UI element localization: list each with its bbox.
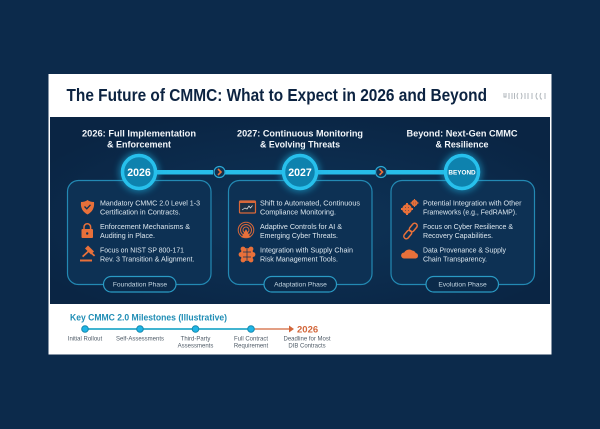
heading: 2027: [237, 128, 363, 150]
node: 2027: 2027: [288, 167, 312, 179]
text: adaptive: [260, 222, 342, 240]
label: deadline: DIB Contracts: [288, 344, 326, 350]
heading: 2026: [82, 128, 196, 150]
text: integration: Integration with Supply Chain: [260, 246, 353, 254]
node: beyond: BEYOND: [448, 169, 476, 176]
text: mandatory: [100, 198, 200, 216]
white card: [48, 74, 552, 354]
label: deadline: [283, 336, 331, 350]
milestone year: 2026: [297, 324, 318, 336]
panel: timeline: [50, 117, 550, 304]
pill: evolution: Evolution Phase: [438, 282, 487, 289]
pill: foundation: [104, 276, 176, 292]
icon: brain network: [239, 247, 255, 262]
node: 2026: 2026: [127, 167, 151, 179]
arrow: to 2026: [289, 326, 294, 332]
node: 2026: [119, 152, 159, 192]
text: enforcement: Enforcement Mechanisms &: [100, 222, 190, 231]
heading: beyond: & Resilience: [436, 138, 488, 150]
text: nist: Focus on NIST SP 800-171: [100, 246, 184, 254]
text: adaptive: Adaptive Controls for AI &: [260, 222, 342, 231]
label: self-assessments: Self-Assessments: [116, 336, 164, 342]
pill: evolution: [426, 276, 498, 292]
text: provenance: Data Provenance & Supply: [423, 246, 506, 254]
arrow node 1: [214, 166, 225, 178]
icon: padlock: [82, 224, 93, 238]
text: nist: Rev. 3 Transition & Alignment.: [100, 254, 194, 264]
pill: adaptation: Adaptation Phase: [274, 282, 327, 289]
text: integration: [260, 246, 353, 264]
icon: chain link: [403, 222, 418, 240]
text: integration: Risk Management Tools.: [260, 254, 338, 264]
panel: card beyond: [391, 180, 534, 284]
icon: radar alert: [238, 222, 254, 238]
text: provenance: [423, 246, 506, 264]
text: potential: Frameworks (e.g., FedRAMP).: [423, 208, 517, 216]
text: provenance: Chain Transparency.: [423, 254, 487, 264]
heading: 2026: 2026: Full Implementation: [82, 128, 196, 138]
label: initial rollout: Initial Rollout: [68, 336, 103, 342]
heading: 2027: 2027: Continuous Monitoring: [237, 128, 363, 138]
title: The Future of CMMC: What to Expect in 2026 and Beyond: [66, 85, 487, 105]
dot: initial: [82, 326, 88, 332]
text: shift: Compliance Monitoring.: [260, 208, 336, 216]
panel: card 2026: [68, 180, 211, 284]
node: 2027: [280, 152, 320, 192]
icon: cloud: [401, 250, 418, 258]
icon: shield: [81, 200, 94, 214]
text: shift: Shift to Automated, Continuous: [260, 198, 360, 208]
label: deadline: Deadline for Most: [283, 336, 331, 342]
label: full contract: Full Contract: [234, 336, 268, 342]
label: third-party: Assessments: [178, 344, 213, 350]
dot: self: [137, 326, 143, 332]
text: enforcement: [100, 222, 190, 240]
text: enforcement: Auditing in Place.: [100, 231, 155, 240]
icon: gavel: [80, 246, 95, 262]
connector lines: [150, 170, 457, 174]
label: third-party: [178, 336, 213, 350]
heading: beyond: [406, 128, 518, 150]
pill: foundation: Foundation Phase: [113, 282, 167, 289]
heading: 2026: & Enforcement: [107, 138, 171, 150]
dot: full: [248, 326, 254, 332]
text: potential: Potential Integration with Other: [423, 198, 522, 208]
panel: card 2027: [228, 180, 372, 284]
node: beyond: [442, 152, 482, 192]
text: potential: [423, 198, 522, 216]
label: full contract: Requirement: [234, 344, 269, 350]
text: focus: Focus on Cyber Resilience &: [423, 222, 513, 231]
pill: adaptation: [264, 276, 336, 292]
text: mandatory: Certification in Contracts.: [100, 208, 180, 216]
dot: third-party: [192, 326, 199, 332]
text: nist: [100, 246, 194, 264]
label: full contract: [234, 336, 269, 350]
milestone timeline: [82, 324, 318, 336]
label: third-party: Third-Party: [181, 336, 210, 342]
arrow node 2: [376, 166, 386, 178]
text: mandatory: Mandatory CMMC 2.0 Level 1-3: [100, 198, 200, 208]
text: focus: [423, 222, 513, 240]
icon: gears: [401, 199, 418, 215]
text: adaptive: Emerging Cyber Threats.: [260, 231, 338, 240]
heading: 2027: & Evolving Threats: [260, 138, 340, 150]
heading: beyond: Beyond: Next-Gen CMMC: [406, 128, 518, 138]
text: shift: [260, 198, 360, 216]
milestones heading: Key CMMC 2.0 Milestones (Illustrative): [70, 312, 227, 322]
logo: [504, 93, 545, 99]
text: focus: Recovery Capabilities.: [423, 231, 493, 240]
icon: monitor chart: [240, 201, 256, 213]
